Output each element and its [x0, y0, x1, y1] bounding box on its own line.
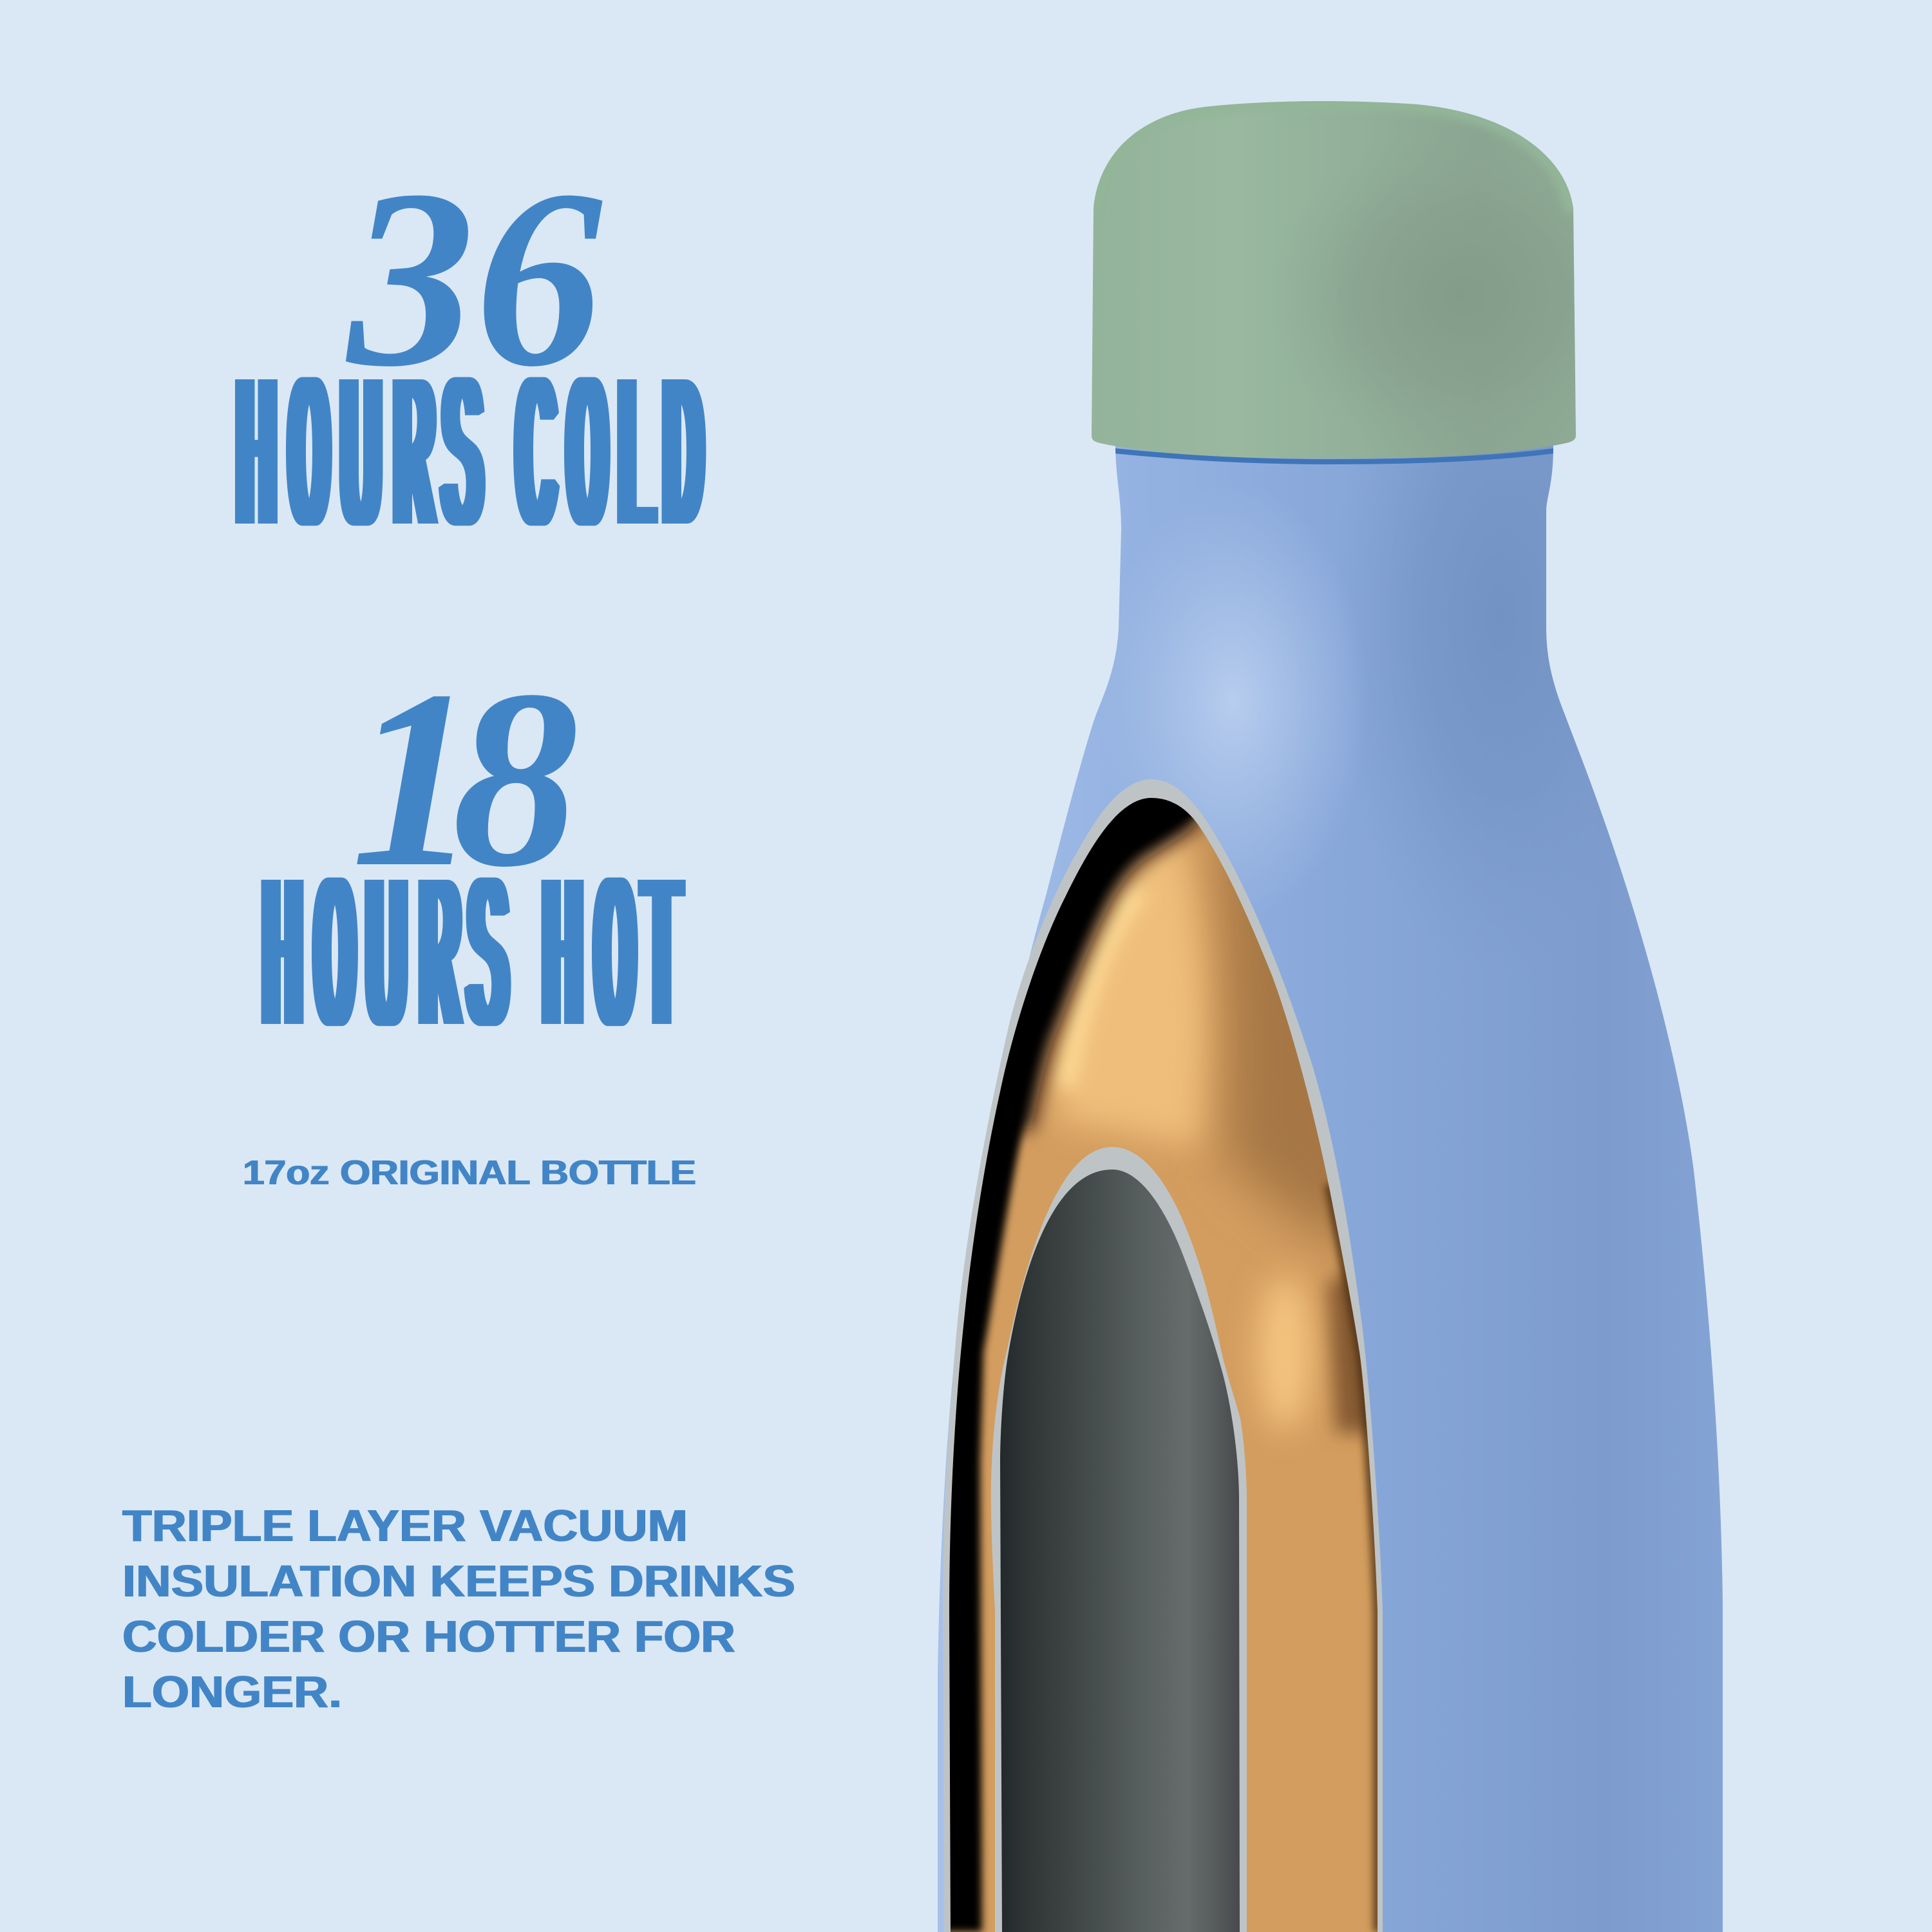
bottle body: [938, 446, 1723, 1932]
caption: bottle size: 17oz ORIGINAL BOTTLE: [243, 1153, 696, 1192]
number 18: 18: [351, 638, 580, 920]
text block: insulation description: TRIPLE LAYER VACUUM: [122, 1501, 688, 1551]
text block: insulation description: INSULATION KEEPS DRINKS: [122, 1556, 795, 1606]
infographic canvas: [122, 101, 1723, 1932]
cutaway: dark interior: [1000, 1170, 1240, 1932]
bottle cap: [1088, 97, 1584, 464]
bottle illustration: [902, 97, 1771, 1932]
number 36: 36: [344, 138, 603, 419]
cutaway: copper layer: [949, 798, 1378, 1932]
label: hours hot: HOURS HOT: [263, 842, 681, 1090]
text block: insulation description: LONGER.: [122, 1667, 342, 1717]
text block: insulation description: [122, 1501, 795, 1717]
cutaway: inner steel wall: [991, 1147, 1247, 1932]
label: hours cold: HOURS COLD: [236, 342, 703, 590]
stat: 18 hours hot: [263, 638, 681, 1090]
text block: insulation description: COLDER OR HOTTER FOR: [122, 1611, 735, 1662]
stat: 36 hours cold: [236, 138, 703, 590]
cutaway: outer steel wall: [943, 779, 1383, 1932]
